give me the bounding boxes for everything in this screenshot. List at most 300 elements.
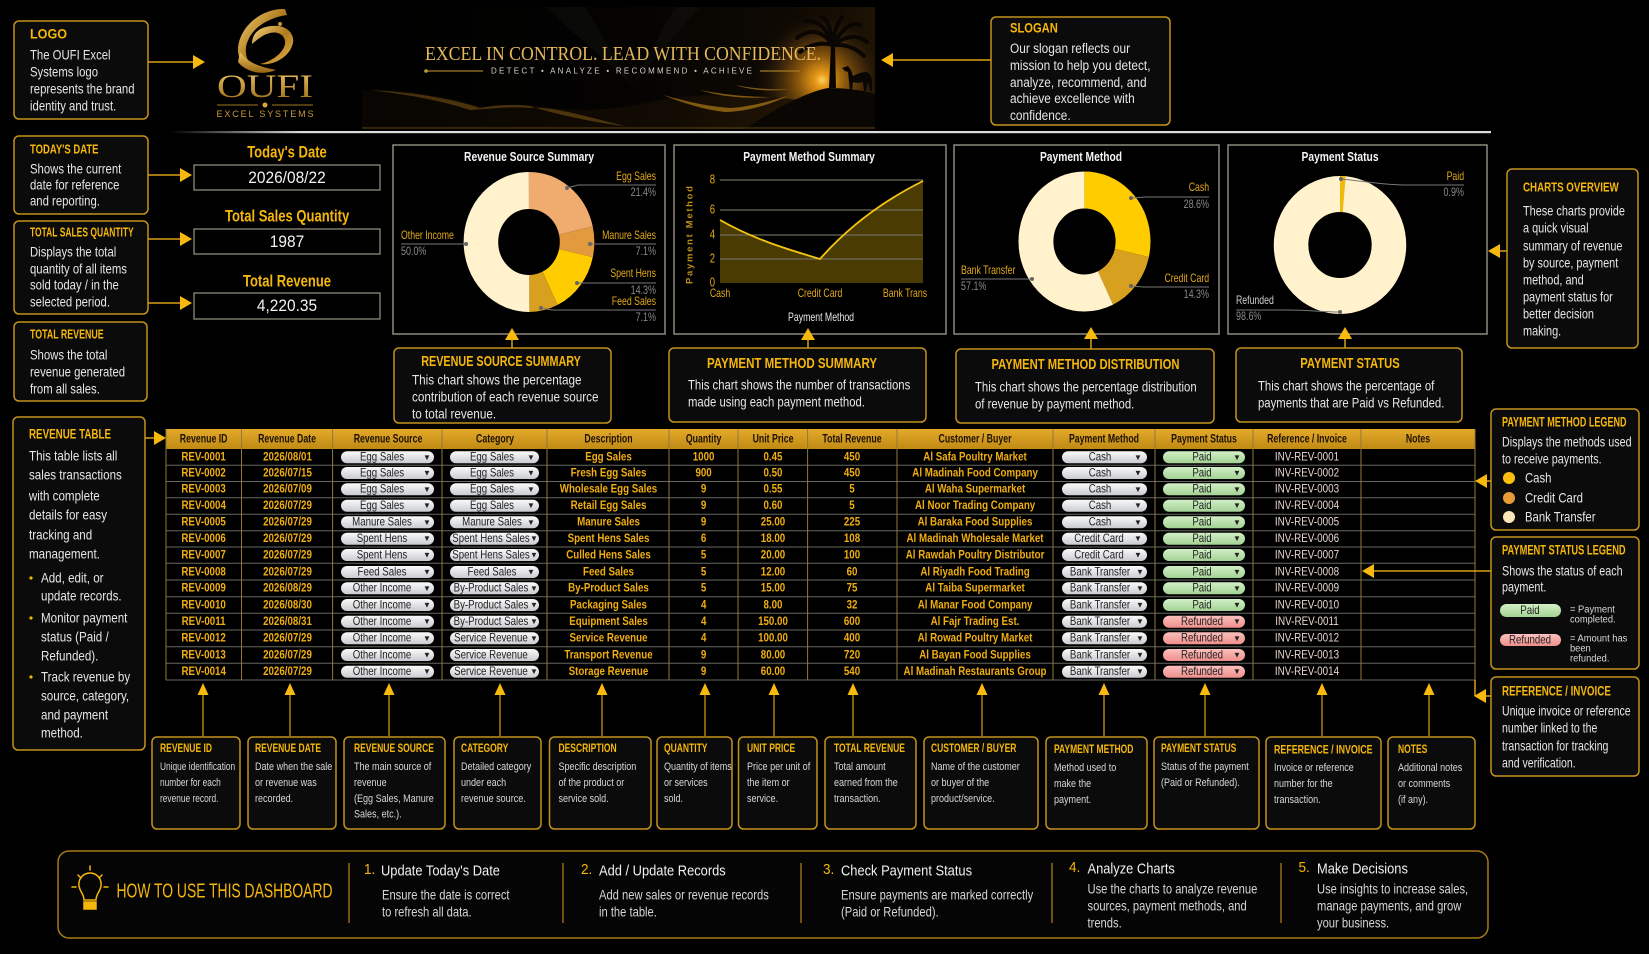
row REV-0003: INV-REV-0003 xyxy=(1275,483,1339,496)
step 2: Add new sales or revenue records xyxy=(599,887,769,903)
column note: revenue id: number for each xyxy=(160,777,221,789)
chart: payment method summary line chart: 0 xyxy=(710,276,715,290)
chart: payment method summary line chart: 8 xyxy=(710,173,715,187)
column note: customer / buyer xyxy=(924,737,1038,829)
column note: unit price: service. xyxy=(747,793,778,805)
arrow: revenue table xyxy=(145,431,166,445)
row REV-0001: ▼ xyxy=(423,453,431,462)
callout: today's date: date for reference xyxy=(30,177,119,193)
row REV-0013: ▼ xyxy=(423,650,431,660)
row REV-0002: Paid xyxy=(1192,466,1212,480)
column note: quantity: or services xyxy=(664,777,708,789)
row REV-0008: Feed Sales xyxy=(583,565,634,579)
column note: revenue id: REVENUE ID xyxy=(160,743,212,755)
callout: reference / invoice: REFERENCE / INVOICE xyxy=(1502,683,1611,699)
row REV-0002: 450 xyxy=(844,466,860,480)
step 5: Make Decisions xyxy=(1317,859,1408,877)
column note: revenue source xyxy=(344,737,445,829)
row REV-0014: ▼ xyxy=(1233,667,1241,676)
row REV-0012: 400 xyxy=(844,632,860,645)
callout: payment status legend: completed. xyxy=(1570,614,1616,626)
row REV-0005: Cash xyxy=(1089,516,1111,529)
column note: customer / buyer: Name of the customer xyxy=(931,761,1020,773)
column note: category: CATEGORY xyxy=(461,743,508,755)
row REV-0011: 2026/08/31 xyxy=(263,615,312,628)
row REV-0005: REV-0005 xyxy=(181,516,226,529)
row REV-0013: 2026/07/29 xyxy=(263,648,312,662)
column note: notes: or comments xyxy=(1398,778,1450,790)
callout: revenue source summary xyxy=(394,348,611,423)
row REV-0014: 60.00 xyxy=(761,665,785,678)
row REV-0005: ▼ xyxy=(527,518,535,527)
row REV-0002: Egg Sales xyxy=(360,466,404,480)
row REV-0005: Manure Sales xyxy=(577,516,640,529)
row REV-0001: Egg Sales xyxy=(470,451,514,464)
table header row: Notes xyxy=(1406,432,1430,446)
row REV-0003: Egg Sales xyxy=(360,483,404,496)
row REV-0002 xyxy=(181,466,1339,480)
KPI: total sales quantity: Total Sales Quantity xyxy=(225,208,350,226)
row REV-0010: 32 xyxy=(847,598,857,612)
callout: slogan: confidence. xyxy=(1010,107,1071,123)
row REV-0004: ▼ xyxy=(423,501,431,510)
callout: payment status legend: Refunded xyxy=(1509,633,1551,647)
column note: payment method: Method used to xyxy=(1054,762,1117,774)
row REV-0002: REV-0002 xyxy=(181,466,226,480)
step 2 xyxy=(581,861,769,920)
KPI: total revenue: Total Revenue xyxy=(243,273,331,291)
step 4: Analyze Charts xyxy=(1088,859,1175,877)
row REV-0003: ▼ xyxy=(527,485,535,494)
row REV-0011: 4 xyxy=(701,615,707,628)
row REV-0007: 2026/07/29 xyxy=(263,548,312,562)
column note: description: service sold. xyxy=(558,793,609,805)
row REV-0011: ▼ xyxy=(1136,617,1144,626)
row REV-0006: 2026/07/29 xyxy=(263,532,312,545)
KPI: total sales quantity: 1987 xyxy=(270,233,304,251)
callout: revenue table: Add, edit, or xyxy=(41,570,104,586)
callout: total revenue: TOTAL REVENUE xyxy=(30,328,104,342)
callout: slogan: SLOGAN xyxy=(1010,20,1058,36)
row REV-0010: Other Income xyxy=(353,598,411,612)
callout: revenue table: sales transactions xyxy=(29,467,122,483)
row REV-0014: Other Income xyxy=(353,665,411,678)
callout: payment method legend: Credit Card xyxy=(1525,490,1583,506)
callout: payment status legend: Paid xyxy=(1520,604,1540,617)
table header row: Reference / Invoice xyxy=(1267,432,1347,446)
step 5: manage payments, and grow xyxy=(1317,898,1461,914)
row REV-0001 xyxy=(181,451,1339,464)
column note: unit price: UNIT PRICE xyxy=(747,743,795,755)
row REV-0007: INV-REV-0007 xyxy=(1275,548,1339,562)
chart: revenue source summary donut: 14.3% xyxy=(631,285,656,297)
step 1: to refresh all data. xyxy=(382,904,472,920)
column note: description: of the product or xyxy=(558,777,625,789)
row REV-0001: ▼ xyxy=(527,453,535,462)
column note: revenue id xyxy=(152,737,240,829)
arrow: payment status legend xyxy=(1362,564,1491,578)
callout: today's date: TODAY'S DATE xyxy=(30,143,99,157)
callout: total sales quantity: quantity of all items xyxy=(30,261,127,277)
row REV-0003: 0.55 xyxy=(764,483,782,496)
row REV-0006: ▼ xyxy=(530,534,538,543)
column note: unit price: Price per unit of xyxy=(747,761,810,773)
callout: charts overview: a quick visual xyxy=(1523,220,1589,236)
row REV-0014: REV-0014 xyxy=(181,665,227,678)
row REV-0008: Paid xyxy=(1192,565,1212,579)
row REV-0013: ▼ xyxy=(1233,650,1241,660)
callout: revenue table: source, category, xyxy=(41,688,129,704)
row REV-0011: INV-REV-0011 xyxy=(1275,615,1339,628)
row REV-0001: ▼ xyxy=(1134,453,1142,462)
column note: total revenue xyxy=(825,737,916,829)
row REV-0009: ▼ xyxy=(530,584,538,593)
row REV-0009: 75 xyxy=(847,582,857,595)
callout: payment method distribution: of revenue by payment method. xyxy=(975,396,1134,412)
row REV-0014: 9 xyxy=(701,665,706,678)
table header row: Revenue Source xyxy=(354,432,422,446)
row REV-0012: ▼ xyxy=(1233,634,1241,643)
arrow: logo callout to logo xyxy=(148,55,205,69)
row REV-0010: Bank Transfer xyxy=(1070,598,1130,612)
callout: slogan: Our slogan reflects our xyxy=(1010,40,1131,56)
row REV-0007: ▼ xyxy=(1134,550,1142,560)
row REV-0004: Egg Sales xyxy=(360,499,404,512)
callout: payment method distribution: This chart shows the percentage distribution xyxy=(975,379,1197,395)
row REV-0014: 2026/07/29 xyxy=(263,665,312,678)
column note: category: revenue source. xyxy=(461,793,526,805)
callout: payment method legend: Displays the methods used xyxy=(1502,434,1632,450)
step 5: 5. xyxy=(1298,860,1310,876)
chart: revenue source summary donut: 7.1% xyxy=(636,312,656,324)
logo: OUFI Excel Systems xyxy=(216,9,314,119)
revenue table xyxy=(166,429,1475,680)
row REV-0006: INV-REV-0006 xyxy=(1275,532,1339,545)
row REV-0008: 60 xyxy=(847,565,857,579)
callout: reference / invoice: Unique invoice or reference xyxy=(1502,703,1631,719)
row REV-0004: REV-0004 xyxy=(181,499,227,512)
row REV-0012: INV-REV-0012 xyxy=(1275,632,1339,645)
row REV-0007: REV-0007 xyxy=(181,548,226,562)
row REV-0005: ▼ xyxy=(1134,518,1142,527)
row REV-0003: 5 xyxy=(849,483,855,496)
column note: revenue source: (Egg Sales, Manure xyxy=(354,793,434,805)
row REV-0009: ▼ xyxy=(1136,584,1144,593)
column note: revenue source: The main source of xyxy=(354,761,431,773)
chart: payment method summary line chart: Bank Trans xyxy=(883,288,927,300)
row REV-0005: Al Baraka Food Supplies xyxy=(918,516,1032,529)
arrow: payment status donut xyxy=(1338,327,1352,348)
row REV-0002: ▼ xyxy=(527,468,535,478)
row REV-0004: Paid xyxy=(1192,499,1212,512)
row REV-0007 xyxy=(181,548,1339,562)
callout: charts overview: These charts provide xyxy=(1523,203,1625,219)
row REV-0014: Bank Transfer xyxy=(1070,665,1130,678)
row REV-0009: Paid xyxy=(1192,582,1212,595)
step 5 xyxy=(1298,859,1468,931)
row REV-0010: Paid xyxy=(1192,598,1212,612)
callout: logo: The OUFI Excel xyxy=(30,47,111,63)
step 3: Check Payment Status xyxy=(841,861,972,879)
column note: category: Detailed category xyxy=(461,761,532,773)
row REV-0008 xyxy=(181,565,1339,579)
row REV-0010: ▼ xyxy=(423,600,431,610)
row REV-0013: Bank Transfer xyxy=(1070,648,1130,662)
row REV-0006: ▼ xyxy=(423,534,431,543)
callout: revenue table: update records. xyxy=(41,588,122,604)
logo: OUFI Excel Systems: OUFI xyxy=(217,69,313,105)
column note: category xyxy=(454,737,541,829)
row REV-0005: Manure Sales xyxy=(352,516,412,529)
callout: payment status legend: Shows the status of each xyxy=(1502,563,1623,579)
row REV-0014: Storage Revenue xyxy=(569,665,648,678)
column note: reference / invoice: number for the xyxy=(1274,778,1333,790)
row REV-0009: ▼ xyxy=(1233,584,1241,593)
row REV-0006: 108 xyxy=(844,532,860,545)
row REV-0006: Spent Hens Sales xyxy=(452,532,530,545)
callout: total revenue: from all sales. xyxy=(30,381,100,397)
row REV-0009: INV-REV-0009 xyxy=(1275,582,1339,595)
arrow: total sales quantity xyxy=(148,232,192,246)
callout: total sales quantity: selected period. xyxy=(30,294,110,310)
table header row: Revenue Date xyxy=(258,432,316,446)
row REV-0009: 5 xyxy=(701,582,706,595)
column note: description xyxy=(550,737,651,829)
callout: slogan: mission to help you detect, xyxy=(1010,57,1151,73)
row REV-0002: 900 xyxy=(695,466,712,480)
chart: payment method summary line chart: 4 xyxy=(710,228,715,242)
callout: charts overview: payment status for xyxy=(1523,289,1613,305)
row REV-0011: ▼ xyxy=(1233,617,1241,626)
row REV-0012: ▼ xyxy=(1136,634,1144,643)
row REV-0008: ▼ xyxy=(1136,568,1144,576)
KPI: today's date xyxy=(194,144,380,190)
row REV-0006: 6 xyxy=(701,532,706,545)
banner: slogan with desert scene xyxy=(362,7,875,129)
column note: reference / invoice: REFERENCE / INVOICE xyxy=(1274,743,1373,757)
row REV-0007: 100 xyxy=(844,548,860,562)
row REV-0011: Refunded xyxy=(1181,615,1223,628)
chart: payment method donut: 28.6% xyxy=(1184,199,1209,211)
row REV-0005: INV-REV-0005 xyxy=(1275,516,1339,529)
column note: payment method xyxy=(1046,737,1147,829)
row REV-0002: Fresh Egg Sales xyxy=(571,466,646,480)
row REV-0003 xyxy=(181,483,1339,496)
row REV-0014: Al Madinah Restaurants Group xyxy=(904,665,1047,678)
row REV-0003: Paid xyxy=(1192,483,1212,496)
callout: slogan: achieve excellence with xyxy=(1010,90,1135,106)
row REV-0004: 9 xyxy=(701,499,706,512)
callout: today's date: and reporting. xyxy=(30,193,100,209)
column note: total revenue: earned from the xyxy=(834,777,898,789)
callout: total sales quantity: sold today / in the xyxy=(30,277,119,293)
chart: payment method summary line chart: 2 xyxy=(710,252,715,266)
step 4: Use the charts to analyze revenue xyxy=(1087,881,1257,897)
callout: revenue table xyxy=(13,417,145,750)
row REV-0012: Al Rowad Poultry Market xyxy=(918,632,1033,645)
column note: revenue date: REVENUE DATE xyxy=(255,743,321,755)
row REV-0013: REV-0013 xyxy=(181,648,226,662)
KPI: today's date: Today's Date xyxy=(247,144,327,162)
column note: unit price xyxy=(738,737,817,829)
callout: payment status xyxy=(1236,348,1462,422)
callout: payment status legend: been xyxy=(1570,643,1591,655)
row REV-0012: 100.00 xyxy=(758,632,788,645)
chart: revenue source summary donut: Spent Hens xyxy=(610,268,656,280)
table header row: Payment Method xyxy=(1069,432,1139,446)
row REV-0007: 5 xyxy=(701,548,706,562)
callout: payment status legend xyxy=(1491,537,1639,669)
callout: payment method legend: Cash xyxy=(1525,470,1552,486)
row REV-0004: ▼ xyxy=(1134,501,1142,510)
table header row: Unit Price xyxy=(753,432,794,446)
callout: payment method legend: to receive payments. xyxy=(1502,451,1602,467)
callout: payment status legend: PAYMENT STATUS LEGEND xyxy=(1502,544,1626,558)
row REV-0013: Refunded xyxy=(1181,648,1223,662)
table header row xyxy=(166,429,1475,449)
row REV-0014: Service Revenue xyxy=(454,665,528,678)
callout: today's date xyxy=(14,136,148,214)
row REV-0004: ▼ xyxy=(527,501,535,510)
callout: charts overview: better decision xyxy=(1523,306,1594,322)
callout: payment method summary: made using each payment method. xyxy=(688,394,865,410)
row REV-0008: 5 xyxy=(701,565,706,579)
row REV-0006: Spent Hens xyxy=(357,532,407,545)
row REV-0004: Al Noor Trading Company xyxy=(915,499,1036,512)
row REV-0010: 8.00 xyxy=(764,598,782,612)
row REV-0013: 9 xyxy=(701,648,706,662)
row REV-0006: ▼ xyxy=(1233,534,1241,543)
row REV-0011: ▼ xyxy=(423,617,431,626)
row REV-0013: 720 xyxy=(844,648,860,662)
callout: total sales quantity xyxy=(14,221,148,314)
row REV-0008: 12.00 xyxy=(761,565,785,579)
divider under header xyxy=(170,131,1491,133)
chart: payment method summary line chart: Credit Card xyxy=(798,288,843,300)
step 4: sources, payment methods, and xyxy=(1087,898,1247,914)
column note: notes: NOTES xyxy=(1398,744,1427,756)
callout: logo: represents the brand xyxy=(30,81,135,97)
row REV-0009: REV-0009 xyxy=(181,582,226,595)
banner: slogan with desert scene: EXCEL IN CONTROL. LEAD WITH CONFIDENCE. xyxy=(425,43,821,65)
callout: today's date: Shows the current xyxy=(30,161,122,177)
callout: logo: Systems logo xyxy=(30,64,98,80)
callout: revenue table: status (Paid / xyxy=(41,629,109,645)
row REV-0007: Paid xyxy=(1192,548,1212,562)
row REV-0002: ▼ xyxy=(1134,468,1142,478)
row REV-0003: ▼ xyxy=(1134,485,1142,494)
column note: total revenue: transaction. xyxy=(834,793,881,805)
heading: how to use: HOW TO USE THIS DASHBOARD xyxy=(116,880,332,902)
step 4: 4. xyxy=(1069,860,1080,876)
callout: payment status: PAYMENT STATUS xyxy=(1300,355,1400,371)
row REV-0007: Spent Hens xyxy=(357,548,407,562)
column note: revenue source: revenue xyxy=(354,777,387,789)
column note: total revenue: TOTAL REVENUE xyxy=(834,743,905,755)
row REV-0009: Bank Transfer xyxy=(1070,582,1130,595)
row REV-0011: Equipment Sales xyxy=(569,615,648,628)
row REV-0010: Packaging Sales xyxy=(570,598,647,612)
chart: revenue source summary donut: Feed Sales xyxy=(612,296,656,308)
column note: reference / invoice: transaction. xyxy=(1274,794,1321,806)
row REV-0012: Bank Transfer xyxy=(1070,632,1130,645)
callout: payment status legend: refunded. xyxy=(1570,653,1609,665)
row REV-0007: Credit Card xyxy=(1074,548,1124,562)
row REV-0004: 2026/07/29 xyxy=(263,499,312,512)
column note: quantity xyxy=(657,737,732,829)
callout: revenue table: details for easy xyxy=(29,507,108,523)
row REV-0005: ▼ xyxy=(423,518,431,527)
column note: notes: Additional notes xyxy=(1398,762,1462,774)
chart: revenue source summary donut: Other Income xyxy=(401,230,454,242)
table header row: Quantity xyxy=(686,432,722,446)
row REV-0001: 2026/08/01 xyxy=(263,451,312,464)
step 3 xyxy=(823,861,1034,920)
row REV-0004: Retail Egg Sales xyxy=(571,499,646,512)
column note: payment status xyxy=(1154,737,1259,829)
row REV-0001: 0.45 xyxy=(764,451,782,464)
row REV-0010: ▼ xyxy=(1136,600,1144,610)
row REV-0011 xyxy=(182,615,1339,628)
row REV-0007: ▼ xyxy=(1233,550,1241,560)
callout: revenue table: Refunded). xyxy=(41,648,98,664)
row REV-0008: Bank Transfer xyxy=(1070,565,1130,579)
row REV-0005: 9 xyxy=(701,516,706,529)
chart: revenue source summary donut: Egg Sales xyxy=(616,171,656,183)
row REV-0011: By-Product Sales xyxy=(454,615,528,628)
callout: reference / invoice: and verification. xyxy=(1502,755,1576,771)
panel: how to use this dashboard xyxy=(58,851,1488,938)
KPI: today's date: 2026/08/22 xyxy=(248,169,326,187)
KPI: total revenue: 4,220.35 xyxy=(257,297,317,315)
column note: unit price: the item or xyxy=(747,777,790,789)
chart: payment status donut: 0.9% xyxy=(1444,187,1464,199)
chart: payment status donut xyxy=(1228,145,1487,334)
column note: payment status: (Paid or Refunded). xyxy=(1161,777,1240,789)
row REV-0005: ▼ xyxy=(1233,518,1241,527)
callout: total revenue: revenue generated xyxy=(30,364,125,380)
row REV-0004: ▼ xyxy=(1233,501,1241,510)
row REV-0011: REV-0011 xyxy=(182,615,226,628)
column note: category: under each xyxy=(461,777,506,789)
arrow: charts overview xyxy=(1488,244,1507,258)
row REV-0009: By-Product Sales xyxy=(454,582,528,595)
step 3: Ensure payments are marked correctly xyxy=(841,887,1034,903)
row REV-0006: ▼ xyxy=(1134,534,1142,543)
column note: quantity: QUANTITY xyxy=(664,743,708,755)
column note: revenue date xyxy=(248,737,336,829)
callout: slogan xyxy=(991,17,1170,125)
callout: charts overview: method, and xyxy=(1523,272,1584,288)
callout: reference / invoice: transaction for tracking xyxy=(1502,738,1608,754)
row REV-0005: 225 xyxy=(844,516,860,529)
chart: payment method donut: Bank Transfer xyxy=(961,265,1016,277)
row REV-0001: 450 xyxy=(844,451,860,464)
row REV-0009: 15.00 xyxy=(761,582,785,595)
row REV-0006: 18.00 xyxy=(761,532,785,545)
row REV-0013: Other Income xyxy=(353,648,411,662)
row REV-0007: Culled Hens Sales xyxy=(566,548,651,562)
row REV-0004: 5 xyxy=(849,499,855,512)
column note: description: DESCRIPTION xyxy=(559,743,617,755)
column note: payment method: make the xyxy=(1054,778,1091,790)
column note: customer / buyer: product/service. xyxy=(931,793,995,805)
row REV-0005: 2026/07/29 xyxy=(263,516,312,529)
step 2: Add / Update Records xyxy=(599,861,726,879)
row REV-0013 xyxy=(181,648,1339,662)
chart: payment method donut: Cash xyxy=(1189,182,1209,194)
row REV-0003: REV-0003 xyxy=(181,483,226,496)
